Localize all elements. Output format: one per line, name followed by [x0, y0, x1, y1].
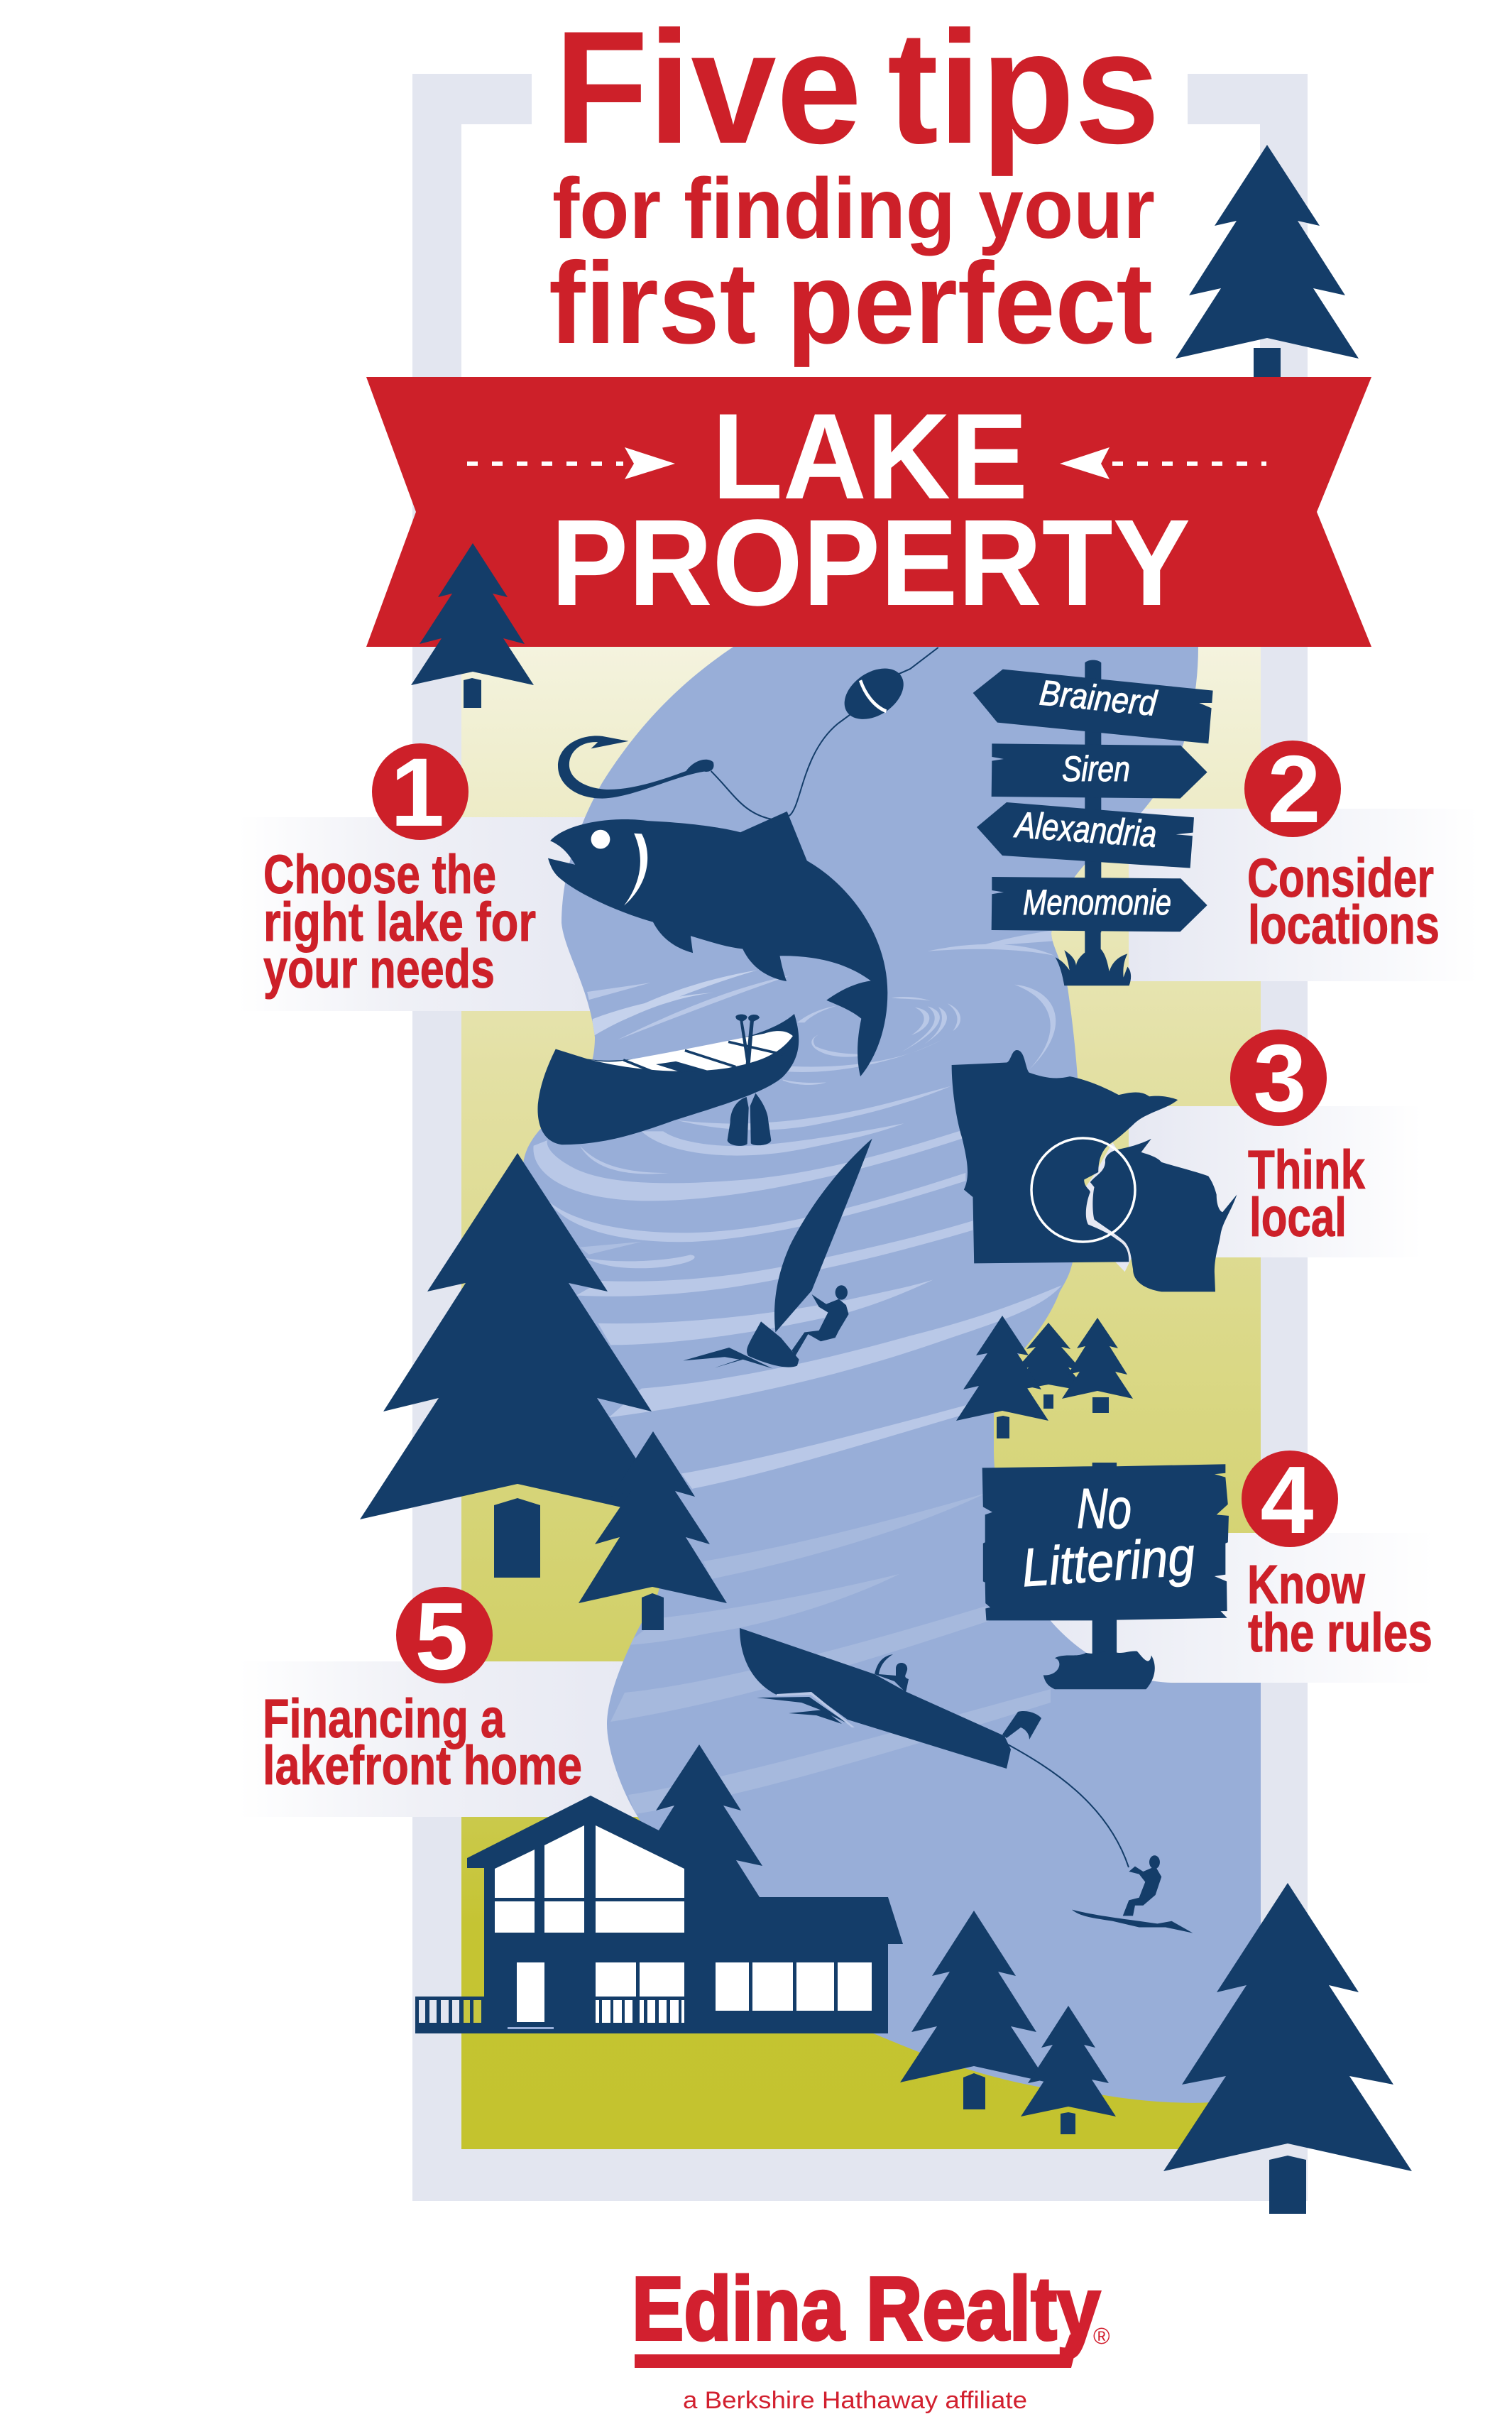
banner ribbon	[366, 377, 1371, 647]
tip 4 text	[1247, 1554, 1432, 1664]
tree: large bottom right	[1163, 1883, 1412, 2214]
badge 2: 2	[1267, 736, 1321, 843]
badge 2	[1244, 736, 1341, 843]
door step	[508, 2027, 554, 2029]
canoe interior	[591, 1031, 793, 1071]
tip 2	[1244, 736, 1440, 956]
title line: Five tips: tips	[887, 0, 1160, 177]
tip 4 text: Know	[1247, 1554, 1366, 1615]
sign text: Menomonie: Menomonie	[1023, 883, 1171, 922]
lakefront house	[415, 1744, 903, 2033]
panel: tip 1 backdrop	[239, 817, 608, 1011]
tree: small left on banner	[411, 543, 534, 708]
deck railing	[419, 2000, 481, 2023]
tip 1	[263, 738, 536, 1000]
banner word PROPERTY: PROPERTY	[551, 493, 1190, 631]
lake	[523, 647, 1261, 2103]
map: Minnesota and Wisconsin	[952, 1050, 1237, 1291]
motorboat	[740, 1628, 1041, 1769]
upper windows	[495, 1825, 684, 1933]
sign text: Brainerd: Brainerd	[1038, 672, 1160, 723]
logo wordmark: Edina Realty	[632, 2259, 1100, 2359]
balcony railing	[596, 2000, 684, 2023]
tow rope	[1007, 1744, 1129, 1867]
signpost boards	[973, 660, 1213, 985]
title line: for finding your: for finding your	[552, 160, 1155, 256]
title line: first perfect: first perfect	[549, 238, 1153, 368]
paddles	[728, 1015, 771, 1146]
signpost with four destinations	[973, 660, 1213, 985]
tip 1 text: Choose the	[263, 844, 496, 905]
tip 1 text	[263, 844, 536, 1000]
tip 4 text: the rules	[1248, 1602, 1432, 1664]
banner word LAKE: LAKE	[712, 388, 1028, 525]
lower windows	[596, 1962, 872, 2011]
fishing hook and line	[558, 648, 938, 819]
sign board and post	[982, 1463, 1229, 1689]
badge 4	[1242, 1446, 1338, 1553]
tree: beside large tree	[579, 1431, 727, 1630]
arrow: left dashed	[467, 447, 675, 479]
panel: tip 4 backdrop	[1022, 1533, 1435, 1683]
tip 5 text	[263, 1688, 582, 1796]
page frame	[412, 71, 1308, 2201]
canoe hull	[538, 1014, 799, 1145]
tip 3	[1230, 1025, 1365, 1248]
logo underline	[635, 2334, 1080, 2368]
tip 5 text: Financing a	[263, 1688, 505, 1749]
tagline: a Berkshire Hathaway affiliate	[683, 2387, 1027, 2414]
tip 4	[1242, 1446, 1432, 1664]
tree: top right	[1176, 145, 1359, 383]
sign: No Littering	[982, 1463, 1229, 1689]
panel: tip 3 backdrop	[1129, 1106, 1423, 1257]
banner text	[551, 388, 1190, 631]
panel: tip 2 backdrop	[1129, 809, 1479, 981]
badge 4: 4	[1260, 1446, 1314, 1553]
tip 1 text: your needs	[263, 939, 495, 1000]
tip 5 text: lakefront home	[263, 1735, 582, 1796]
tip 3 text: Think	[1248, 1140, 1365, 1201]
water ripples	[533, 930, 1062, 1814]
tree: small by the shore	[1021, 2006, 1116, 2134]
tip 3 text	[1248, 1140, 1365, 1248]
sign text: Siren: Siren	[1062, 749, 1130, 789]
title line: Five tips	[554, 0, 1160, 177]
title line: Five tips: Five	[554, 0, 862, 177]
tree: large left	[360, 1153, 675, 1578]
bobber	[837, 658, 911, 730]
logo: Edina Realty	[632, 2259, 1110, 2368]
tip 2 text	[1247, 848, 1440, 956]
hook	[558, 736, 714, 799]
registered mark: ®	[1093, 2323, 1110, 2349]
land background	[461, 647, 1261, 2149]
title	[549, 0, 1160, 368]
trees: cluster of three near map	[956, 1316, 1133, 1438]
panel: tip 5 backdrop	[239, 1661, 650, 1817]
badge 3	[1230, 1025, 1327, 1132]
fishing line	[711, 648, 938, 819]
windsurfer	[683, 1139, 872, 1369]
canoe with paddles	[538, 1014, 799, 1146]
tip 3 text: local	[1249, 1187, 1347, 1248]
tip 2 text: Consider	[1247, 848, 1434, 909]
arrow: right dashed	[1060, 447, 1266, 479]
tip 2 text: locations	[1248, 895, 1440, 956]
sign text: No: No	[1077, 1477, 1132, 1540]
badge 1	[372, 738, 469, 847]
water skier	[1072, 1855, 1193, 1933]
fish	[548, 812, 887, 1076]
tip 1 text: right lake for	[263, 892, 536, 953]
tip 5	[263, 1583, 582, 1796]
badge 5: 5	[415, 1583, 469, 1690]
badge 1: 1	[390, 738, 444, 847]
house silhouette with tree behind	[415, 1744, 903, 2033]
sign text: Alexandria: Alexandria	[1012, 804, 1158, 856]
badge 3: 3	[1253, 1025, 1307, 1132]
sign text: Littering: Littering	[1020, 1526, 1197, 1598]
door	[517, 1962, 544, 2022]
badge 5	[396, 1583, 493, 1690]
tree: by the shore	[900, 1911, 1048, 2109]
